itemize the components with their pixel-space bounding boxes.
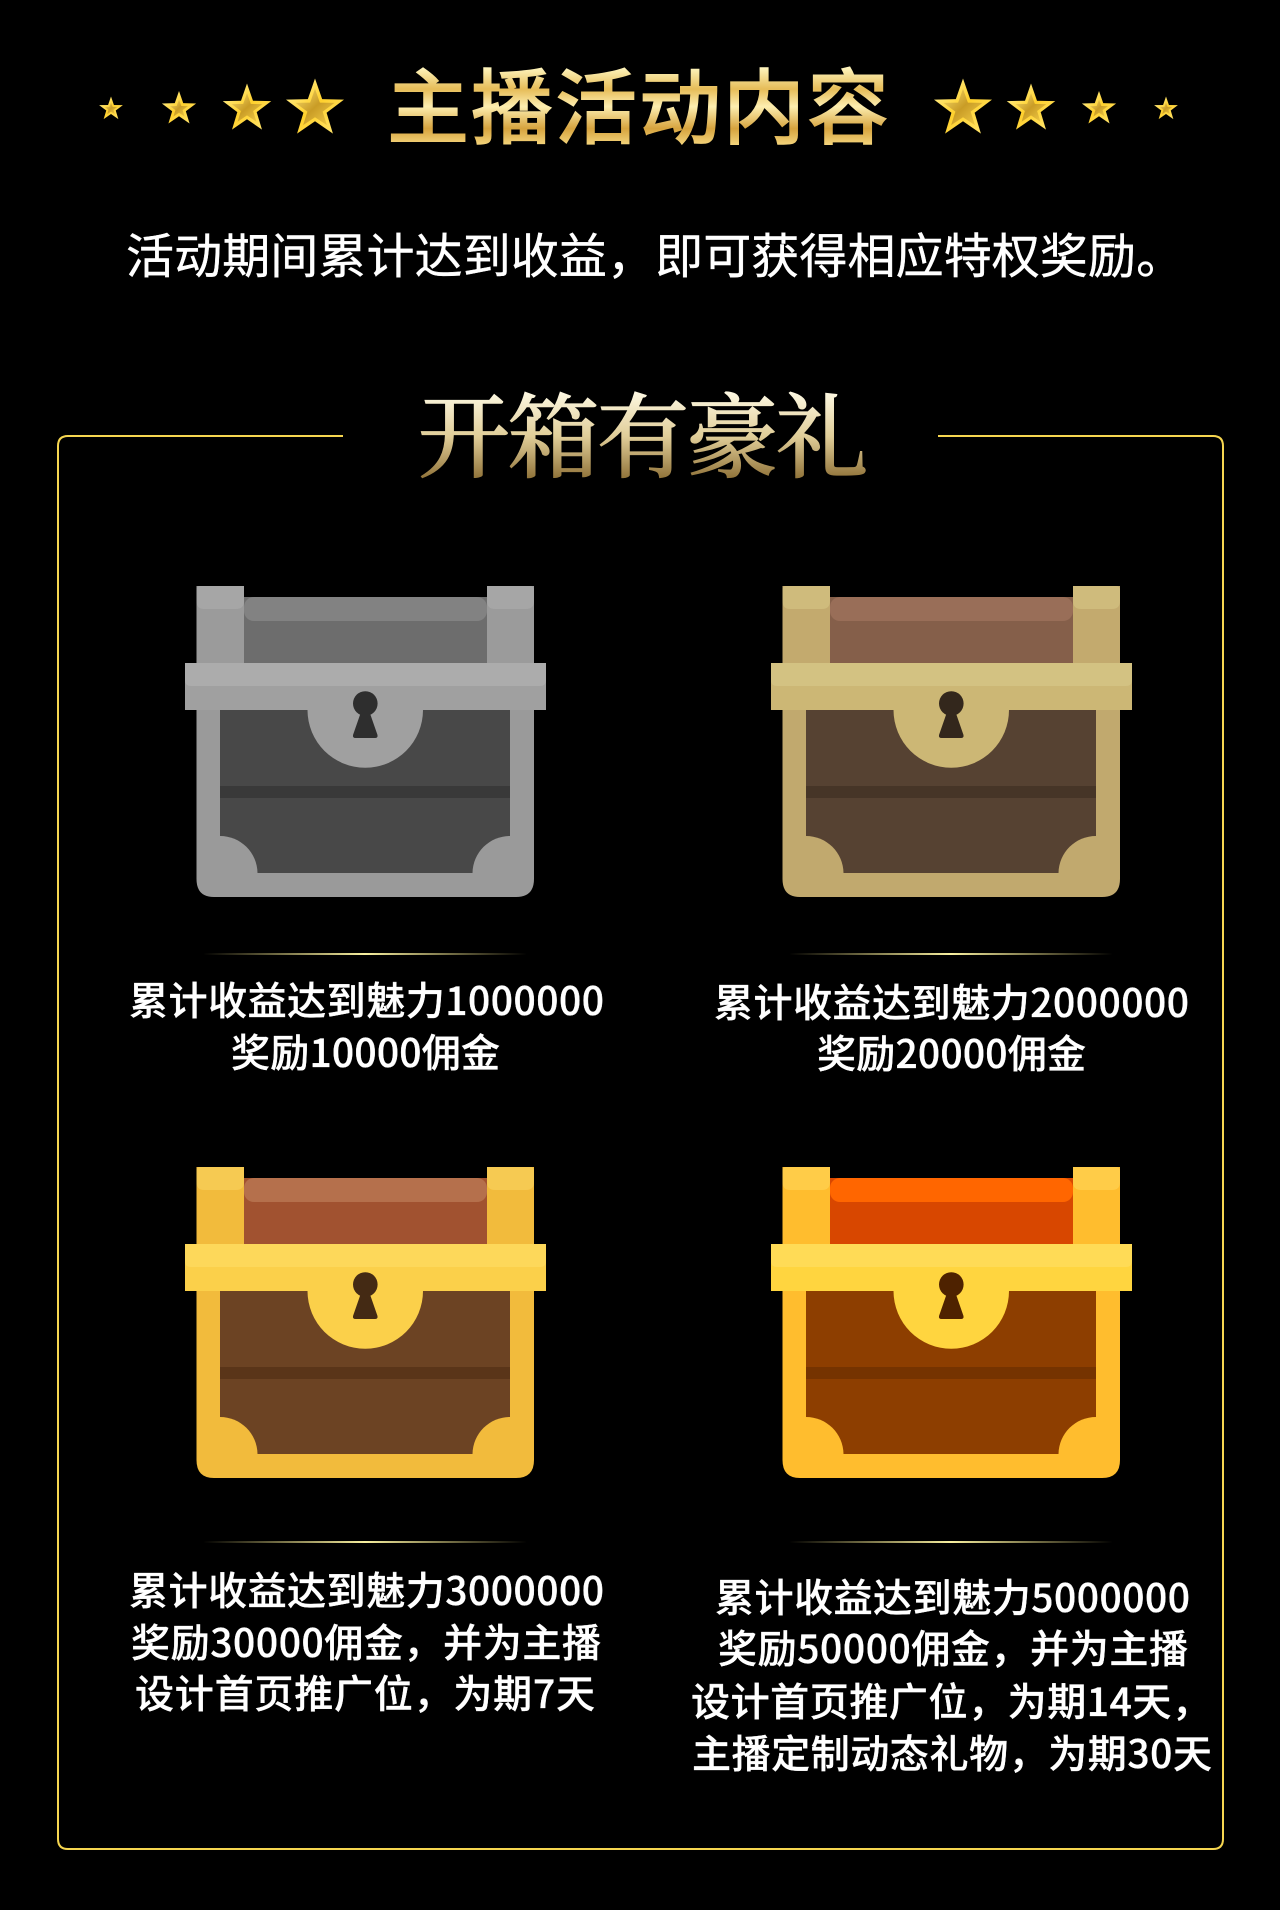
icon: star 6 [1007, 84, 1055, 130]
caption: tier 3: 奖励30000佣金，并为主播 [131, 1613, 601, 1669]
icon: silver chest [185, 586, 546, 897]
heading row: stars and title [99, 42, 1178, 161]
divider [203, 953, 527, 955]
section heading: 开箱有豪礼 [418, 365, 868, 497]
icon: bronze chest [771, 586, 1132, 897]
divider [789, 1541, 1113, 1543]
caption: tier 2 [714, 973, 1189, 1080]
caption: tier 4: 奖励50000佣金，并为主播 [718, 1619, 1188, 1675]
caption: tier 3 [129, 1561, 604, 1720]
icon: star 2 [162, 91, 196, 124]
caption: tier 1 [129, 971, 604, 1079]
caption: tier 1: 奖励10000佣金 [231, 1023, 500, 1079]
icon: star 8 [1154, 96, 1178, 119]
icon: star 4 [286, 78, 344, 134]
caption: tier 4 [691, 1568, 1212, 1780]
caption: tier 3: 设计首页推广位，为期7天 [135, 1664, 595, 1720]
caption: tier 1: 累计收益达到魅力1000000 [129, 971, 604, 1027]
caption: tier 4: 设计首页推广位，为期14天， [691, 1672, 1211, 1728]
caption: tier 4: 累计收益达到魅力5000000 [715, 1568, 1190, 1624]
caption: tier 4: 主播定制动态礼物，为期30天 [692, 1724, 1212, 1780]
subtitle: 活动期间累计达到收益，即可获得相应特权奖励。 [126, 217, 1184, 287]
divider [203, 1541, 527, 1543]
panel frame [58, 436, 1223, 1849]
caption: tier 2: 奖励20000佣金 [817, 1024, 1086, 1080]
caption: tier 3: 累计收益达到魅力3000000 [129, 1561, 604, 1617]
icon: star 1 [99, 96, 123, 119]
title: 主播活动内容 [387, 42, 889, 161]
icon: star 5 [934, 78, 992, 134]
icon: star 7 [1082, 91, 1116, 124]
caption: tier 2: 累计收益达到魅力2000000 [714, 973, 1189, 1029]
icon: star 3 [223, 84, 271, 130]
icon: orange chest [771, 1167, 1132, 1478]
icon: gold chest [185, 1167, 546, 1478]
divider [789, 953, 1113, 955]
